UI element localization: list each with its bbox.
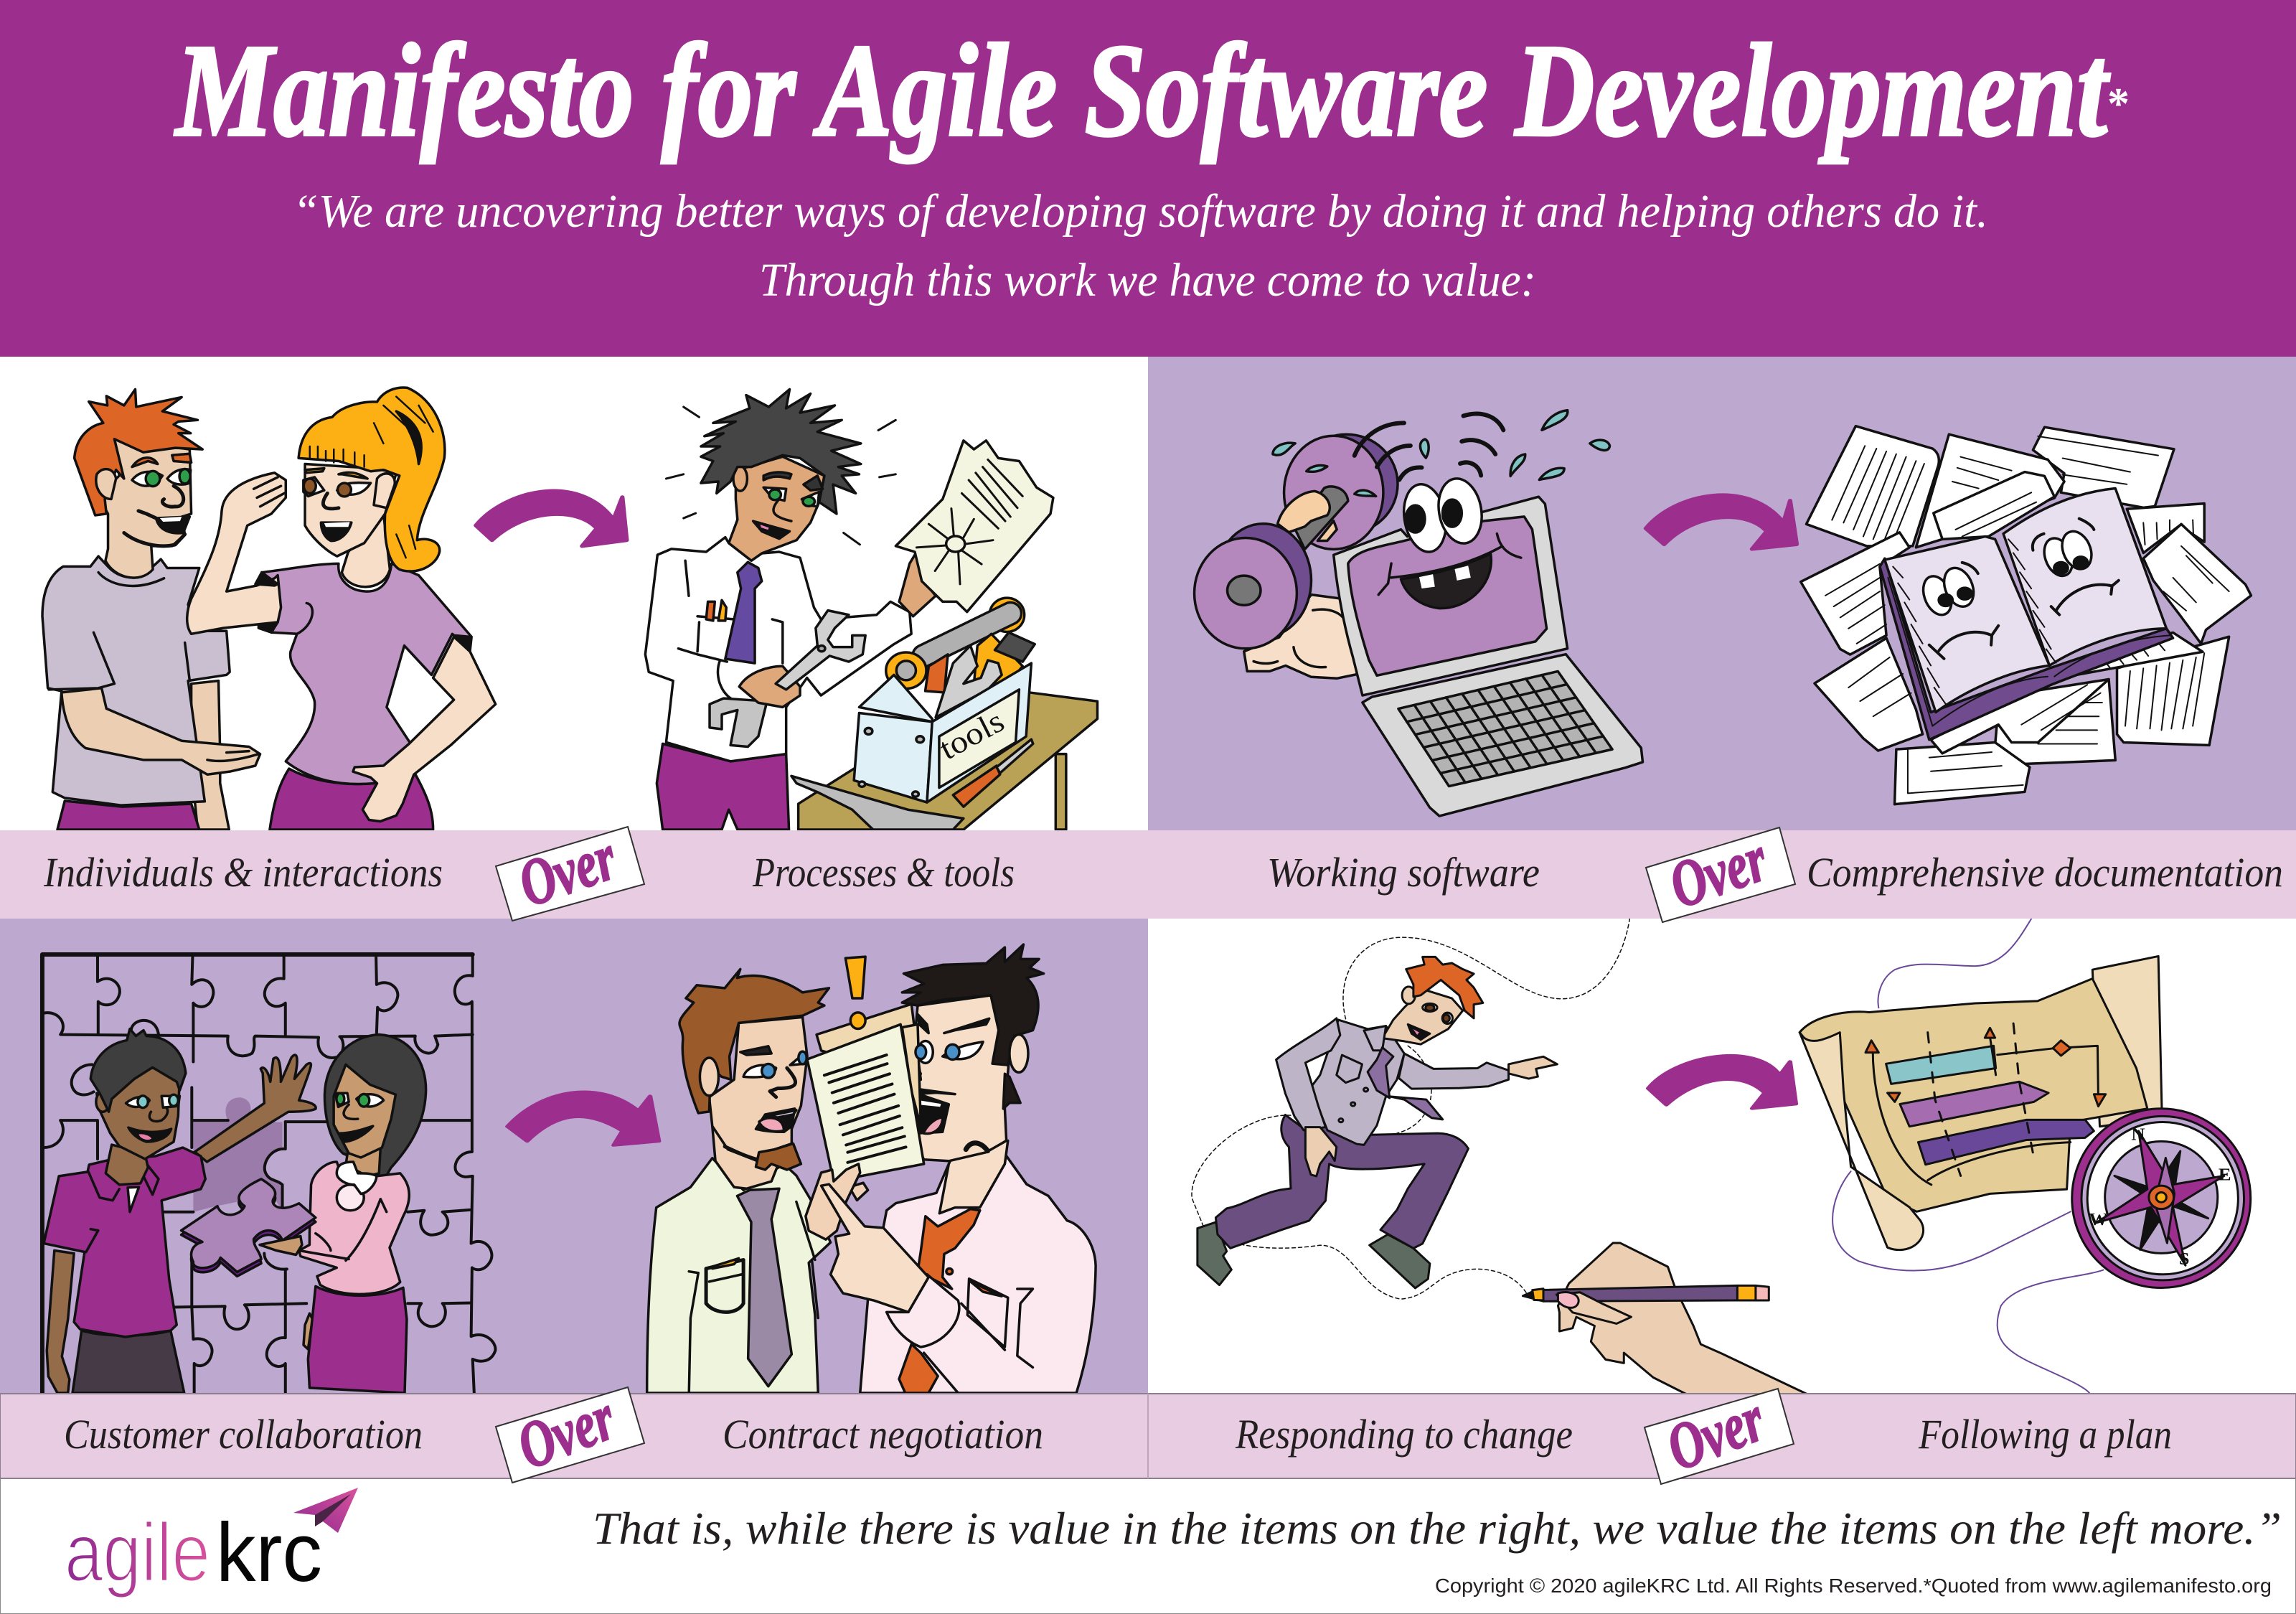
plan scroll map [1799,956,2162,1250]
gripping hand and wrenches [710,611,865,746]
compass: S [2179,1249,2189,1269]
arrow: panel 4 [1648,1056,1796,1109]
saw [791,776,964,830]
arrow: panel 2 [1646,495,1797,549]
contract paper [807,957,933,1181]
title asterisk: * [2107,80,2130,128]
label: Processes & tools: Processes & tools [752,849,1015,896]
man in purple shirt [44,1029,316,1393]
logo wordmark krc: krc [216,1506,322,1599]
toolbox with tools [854,598,1035,807]
label: Following a plan: Following a plan [1918,1411,2172,1458]
label: Working software: Working software [1267,849,1540,896]
arrow: panel 3 [507,1092,659,1145]
woman with yellow ponytail [187,388,496,830]
worried open book [1880,489,2173,740]
arrow: panel 1 [476,491,626,546]
exclamation mark [845,957,865,1029]
dumbbell and arm [1195,434,1398,678]
panel: processes and tools illustration [645,389,1097,830]
scattered paper pile [1801,426,2251,804]
woman in pink blouse [299,1035,426,1393]
compass: E [2219,1165,2231,1184]
tag: over 2: Over [1660,821,1777,922]
intro quote line 1: “We are uncovering better ways of developing software by doing it and helping others do it. [293,185,1988,238]
panel: customer collaboration illustration [42,954,495,1393]
hand with pencil [1523,1243,1807,1394]
panel: responding to change illustration [1192,918,2251,1394]
intro quote line 2: Through this work we have come to value: [759,254,1536,306]
label: Individuals & interactions: Individuals & interactions [43,849,443,896]
logo: agileKRC [65,1488,358,1599]
man in pink shirt [860,944,1096,1393]
panel: working software illustration [1195,410,1643,816]
running man [1198,957,1557,1288]
tag: over 3: Over [508,1380,625,1483]
logo paper plane [293,1488,358,1533]
dashed path [1192,918,1629,1299]
compass: N [2131,1124,2145,1144]
hands [806,1164,959,1347]
man in pale green shirt [647,969,831,1393]
header panel [0,0,2296,357]
raised hand and plan paper [895,441,1053,616]
closing quote: That is, while there is value in the items on the right, we value the items on the left more.” [593,1503,2282,1554]
tag: over 1: Over [509,820,626,921]
sweat drops and strain marks [1273,410,1610,496]
man with red hair [42,389,260,830]
panel: individuals and interactions illustration [42,388,496,830]
label band: row 1 [0,830,2296,919]
compass: W [2089,1209,2108,1229]
laptop with face [1334,476,1643,816]
label: Contract negotiation: Contract negotiation [723,1411,1043,1458]
label band: row 2 [0,1394,2296,1478]
tools label: tools [931,705,1012,766]
thin wandering line [1832,918,2104,1394]
panel: contract negotiation illustration [647,944,1096,1393]
tag: over 4: Over [1657,1381,1774,1485]
table [799,693,1097,830]
compass [2072,1109,2251,1287]
stressed man [645,389,911,830]
logo wordmark agile: agile [65,1506,210,1599]
puzzle piece [182,1179,316,1276]
stress lines [666,407,895,545]
panel: comprehensive documentation illustration [1801,426,2251,804]
jigsaw wall [42,954,495,1393]
label: Customer collaboration: Customer collaboration [64,1411,423,1458]
puzzle hole [193,1097,283,1212]
panel backgrounds [0,357,2296,1394]
copyright note: Copyright © 2020 agileKRC Ltd. All Rights Reserved.*Quoted from www.agilemanifesto.org [1435,1575,2272,1597]
label: Responding to change: Responding to change [1235,1411,1573,1458]
